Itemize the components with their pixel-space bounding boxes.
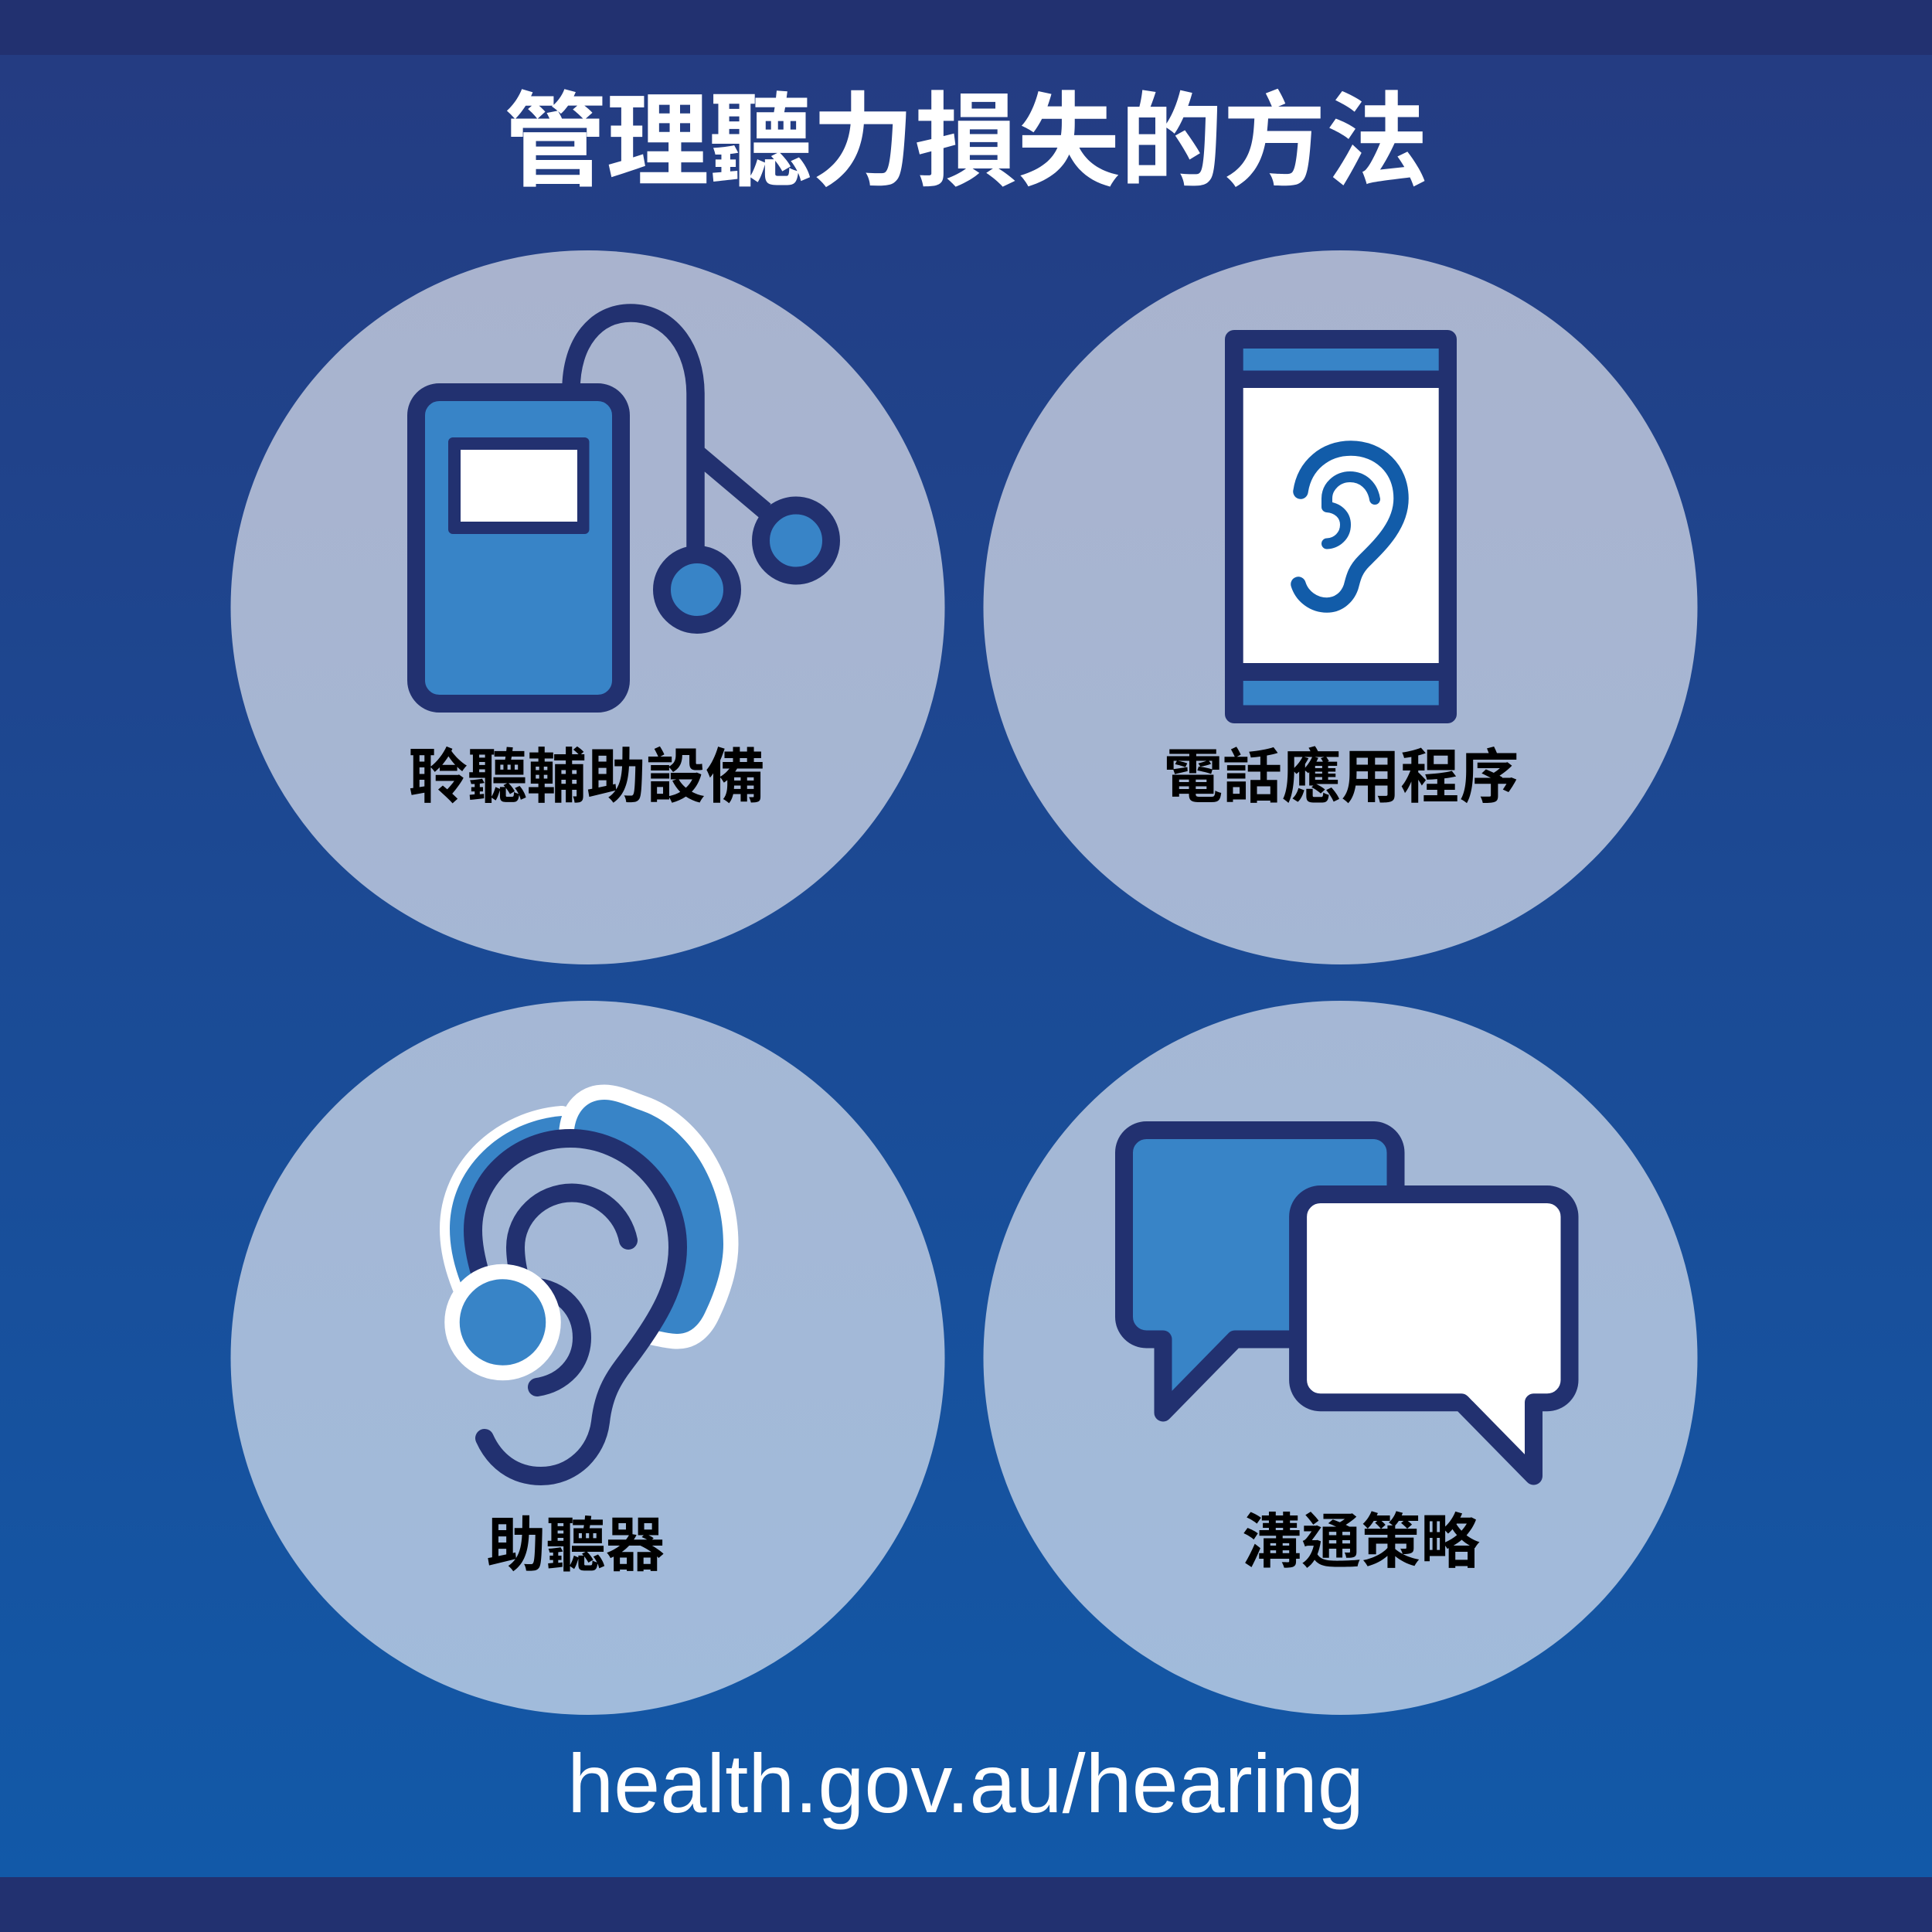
label: 電話應用程序 [1163, 745, 1519, 811]
circle background [230, 250, 944, 964]
title: 管理聽力損失的方法 [504, 85, 1428, 199]
circle background [983, 250, 1697, 964]
icon: phone with ear [1225, 330, 1457, 723]
label: 助聽器 [487, 1513, 665, 1580]
circle background [983, 1001, 1697, 1715]
panel: communication strategies [983, 1001, 1697, 1715]
panel: assistive listening devices [230, 250, 944, 964]
icon: speech bubbles [1124, 1130, 1570, 1476]
circle background [230, 1001, 944, 1715]
panel: phone apps [983, 250, 1697, 964]
top band [0, 0, 1932, 55]
label: 聆聽輔助設備 [408, 744, 765, 811]
icon: listening device [416, 313, 832, 703]
icon: hearing aid on ear [450, 1100, 723, 1476]
bottom band [0, 1877, 1932, 1932]
website url: health.gov.au/hearing [567, 1736, 1364, 1830]
panel: hearing aids [230, 1001, 944, 1715]
label: 溝通策略 [1242, 1509, 1480, 1576]
